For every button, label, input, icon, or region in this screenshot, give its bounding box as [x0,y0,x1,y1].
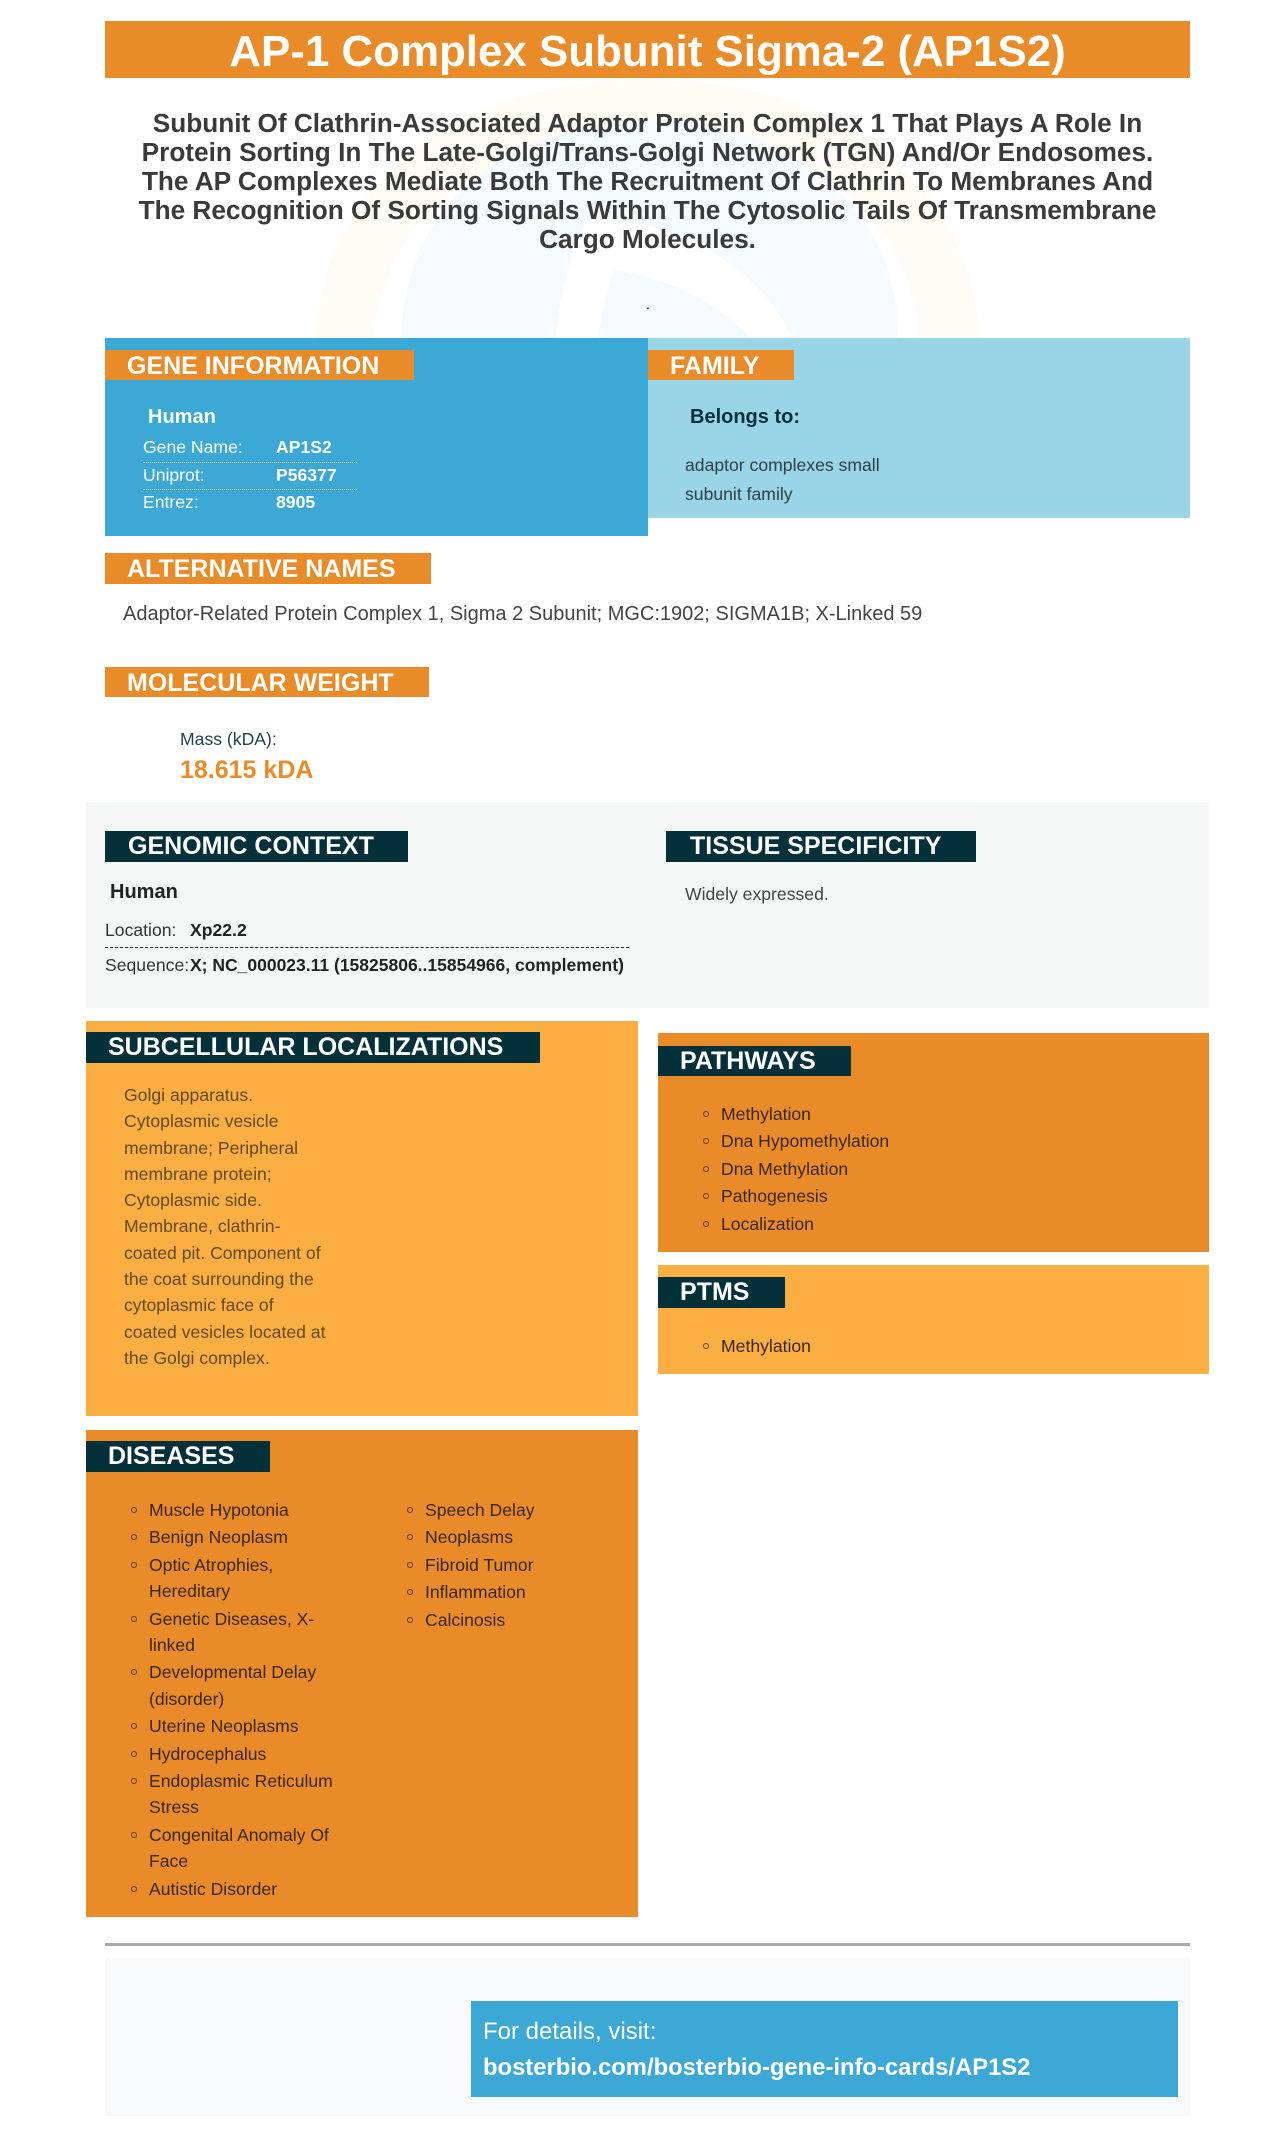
heading: family [648,350,794,380]
localization text: cytoplasmic face of [124,1295,274,1315]
disease list column 1: Congenital Anomaly Of [149,1825,329,1845]
callout text: For details, visit: [483,2018,656,2045]
heading: diseases [86,1441,270,1472]
disease list column 1: Face [149,1851,188,1871]
location row: Xp22.2 [190,920,247,940]
localization text: Membrane, clathrin- [124,1216,280,1236]
disease list column 1: Genetic Diseases, X- [149,1609,314,1629]
sequence row: Sequence: [105,955,189,975]
species label: Human [110,881,178,903]
disease list column 1: Stress [149,1797,199,1817]
disease list column 1: Developmental Delay [149,1662,316,1682]
heading: subcellular localizations: SUBCELLULAR LOCALIZATIONS [108,1033,503,1061]
mass label: Mass (kDA): [180,729,277,749]
entrez row [143,492,315,512]
gene description: Protein Sorting In The Late-Golgi/Trans-Golgi Network (TGN) And/Or Endosomes. [142,137,1153,167]
disease list column 1: (disorder) [149,1689,224,1709]
disease list column 1: Uterine Neoplasms [149,1716,299,1736]
panel: diseases [86,1430,638,1917]
heading: ptms: PTMS [680,1278,749,1306]
pathway list: Methylation [721,1104,811,1124]
uniprot row: P56377 [276,465,337,485]
entrez row: Entrez: [143,492,199,512]
heading: ptms [658,1277,785,1308]
heading: genomic context: GENOMIC CONTEXT [128,832,374,860]
gene description [138,108,1156,254]
pathway list: Dna Methylation [721,1159,848,1179]
localization text: Cytoplasmic side. [124,1190,262,1210]
panel: family [648,338,1190,518]
localization text: membrane protein; [124,1164,272,1184]
gene name row: Gene Name: [143,437,243,457]
disease list column 1: Hydrocephalus [149,1744,266,1764]
heading: tissue specificity: TISSUE SPECIFICITY [690,832,941,860]
title banner: AP-1 Complex Subunit Sigma-2 (AP1S2) [229,27,1066,76]
pathway list: Dna Hypomethylation [721,1131,889,1151]
pathway list: Localization [721,1214,814,1234]
ptm list: Methylation [721,1336,811,1356]
species label: Human [148,406,216,428]
localization text: the coat surrounding the [124,1269,314,1289]
callout url: bosterbio.com/bosterbio-gene-info-cards/AP1S2 [483,2054,1030,2081]
sequence row [105,955,624,975]
gene name row [143,432,357,463]
title banner [105,21,1190,78]
panel: ptms [658,1265,1209,1374]
disease list column 1: linked [149,1635,195,1655]
disease list column 1: Benign Neoplasm [149,1527,288,1547]
heading: diseases: DISEASES [108,1442,234,1470]
disease list column 1: Hereditary [149,1581,230,1601]
gene description: The Recognition Of Sorting Signals Within The Cytosolic Tails Of Transmembrane [139,195,1156,225]
alternative names text: Adaptor-Related Protein Complex 1, Sigma 2 Subunit; MGC:1902; SIGMA1B; X-Linked 59 [123,603,922,625]
localization text: Cytoplasmic vesicle [124,1111,278,1131]
heading: gene information: GENE INFORMATION [127,352,379,380]
mass value: 18.615 kDA [180,756,313,784]
localization text: Golgi apparatus. [124,1085,253,1105]
heading: pathways: PATHWAYS [680,1047,816,1075]
callout: details link [471,2001,1178,2097]
localization text: coated pit. Component of [124,1243,321,1263]
gene description: Subunit Of Clathrin-Associated Adaptor Protein Complex 1 That Plays A Role In [153,108,1142,138]
localization text [124,1085,326,1368]
panel: genomic context and tissue specificity [86,802,1209,1008]
localization text: coated vesicles located at [124,1322,325,1342]
heading: pathways [658,1046,851,1076]
disease list column 2: Calcinosis [425,1610,505,1630]
belongs to label: Belongs to: [690,406,800,428]
disease list column 2: Fibroid Tumor [425,1555,534,1575]
panel: footer [105,1958,1190,2116]
heading: alternative names: ALTERNATIVE NAMES [127,555,396,583]
location row: Location: [105,920,176,940]
disease list column 1 [131,1500,333,1899]
disease list column 2 [407,1500,535,1630]
localization text: the Golgi complex. [124,1348,270,1368]
disease list column 2: Speech Delay [425,1500,535,1520]
localization text: membrane; Peripheral [124,1138,298,1158]
uniprot row [143,460,357,490]
disease list column 2: Inflammation [425,1582,526,1602]
gene description: The AP Complexes Mediate Both The Recruitment Of Clathrin To Membranes And [142,166,1153,196]
disease list column 1: Muscle Hypotonia [149,1500,289,1520]
heading: family: FAMILY [670,352,759,380]
panel: pathways [658,1033,1209,1252]
panel: gene information [105,338,648,536]
disease list column 1: Endoplasmic Reticulum [149,1771,333,1791]
pathway list: Pathogenesis [721,1186,828,1206]
family text: adaptor complexes small [685,455,880,475]
disease list column 2: Neoplasms [425,1527,513,1547]
panel: genomic context and tissue specificity: X; NC_000023.11 (15825806..15854966, complement) [190,955,624,975]
entrez row: 8905 [276,492,315,512]
background watermark logo [315,80,979,338]
heading: molecular weight: MOLECULAR WEIGHT [127,669,394,697]
tissue text: Widely expressed. [685,884,829,904]
panel: subcellular localizations [86,1021,638,1416]
family text: subunit family [685,484,793,504]
family text [685,455,880,504]
gene description: Cargo Molecules. [539,224,756,254]
disease list column 1: Autistic Disorder [149,1879,277,1899]
small dot: . [646,296,650,312]
pathway list [703,1104,889,1234]
gene name row: AP1S2 [276,437,332,457]
uniprot row: Uniprot: [143,465,205,485]
location row [105,918,629,948]
disease list column 1: Optic Atrophies, [149,1555,273,1575]
